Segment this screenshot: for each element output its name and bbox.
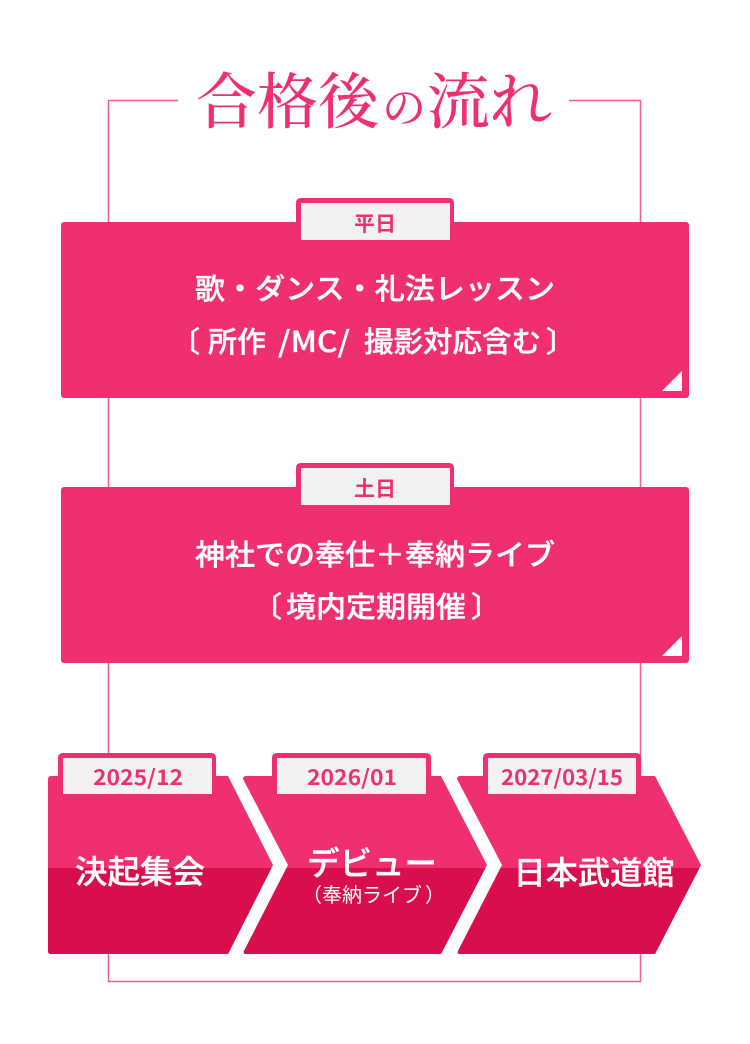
text: rally: 決起集会	[75, 847, 205, 893]
text: budokan: 日本武道館	[514, 848, 674, 894]
title: 流れ	[427, 70, 552, 137]
text: debut note: ）	[425, 879, 445, 908]
tab: weekdays	[296, 198, 454, 240]
tab: 2025/12: 2025/12	[93, 762, 183, 792]
tab: 2027/03/15	[483, 753, 641, 794]
text: saturday details: 境内定期開催	[286, 584, 466, 626]
text: weekdays details	[171, 319, 575, 361]
panel: weekdays	[61, 198, 689, 398]
icon: corner fold	[662, 636, 682, 656]
text: saturday details: 〔	[253, 584, 282, 626]
tab: 2025/12	[58, 753, 216, 794]
text: saturday service: 神社での奉仕＋奉納ライブ	[195, 532, 555, 574]
text: weekdays lessons: 歌・ダンス・礼法レッスン	[195, 266, 555, 308]
tab: 2027/03/15: 2027/03/15	[501, 762, 623, 792]
tab: weekdays: 平日	[354, 208, 396, 238]
text: debut note	[302, 879, 445, 908]
icon: corner fold	[662, 371, 682, 391]
text: debut note: 奉納ライブ	[322, 879, 422, 908]
title	[196, 70, 552, 137]
chevron: 2026/01	[243, 753, 487, 954]
text: saturday details: 〕	[471, 584, 500, 626]
title: 合格後	[196, 70, 381, 137]
text: weekdays details: 〕	[546, 319, 575, 361]
panel: saturday	[61, 463, 689, 663]
tab: 2026/01: 2026/01	[307, 762, 397, 792]
text: debut note: （	[302, 879, 322, 908]
title: の	[382, 84, 426, 133]
frame line	[108, 100, 640, 982]
text: weekdays details: /MC/	[278, 319, 350, 361]
tab: saturday: 土日	[354, 473, 396, 503]
chevron: 2025/12	[48, 753, 273, 954]
chevron: 2027/03/15	[457, 753, 701, 954]
text: weekdays details: 所作	[208, 319, 266, 361]
text: weekdays details: 〔	[171, 319, 200, 361]
text: weekdays details: 撮影対応含む	[364, 319, 541, 361]
tab: 2026/01	[272, 753, 431, 794]
tab: saturday	[296, 463, 454, 505]
text: debut: デビュー	[307, 837, 437, 885]
